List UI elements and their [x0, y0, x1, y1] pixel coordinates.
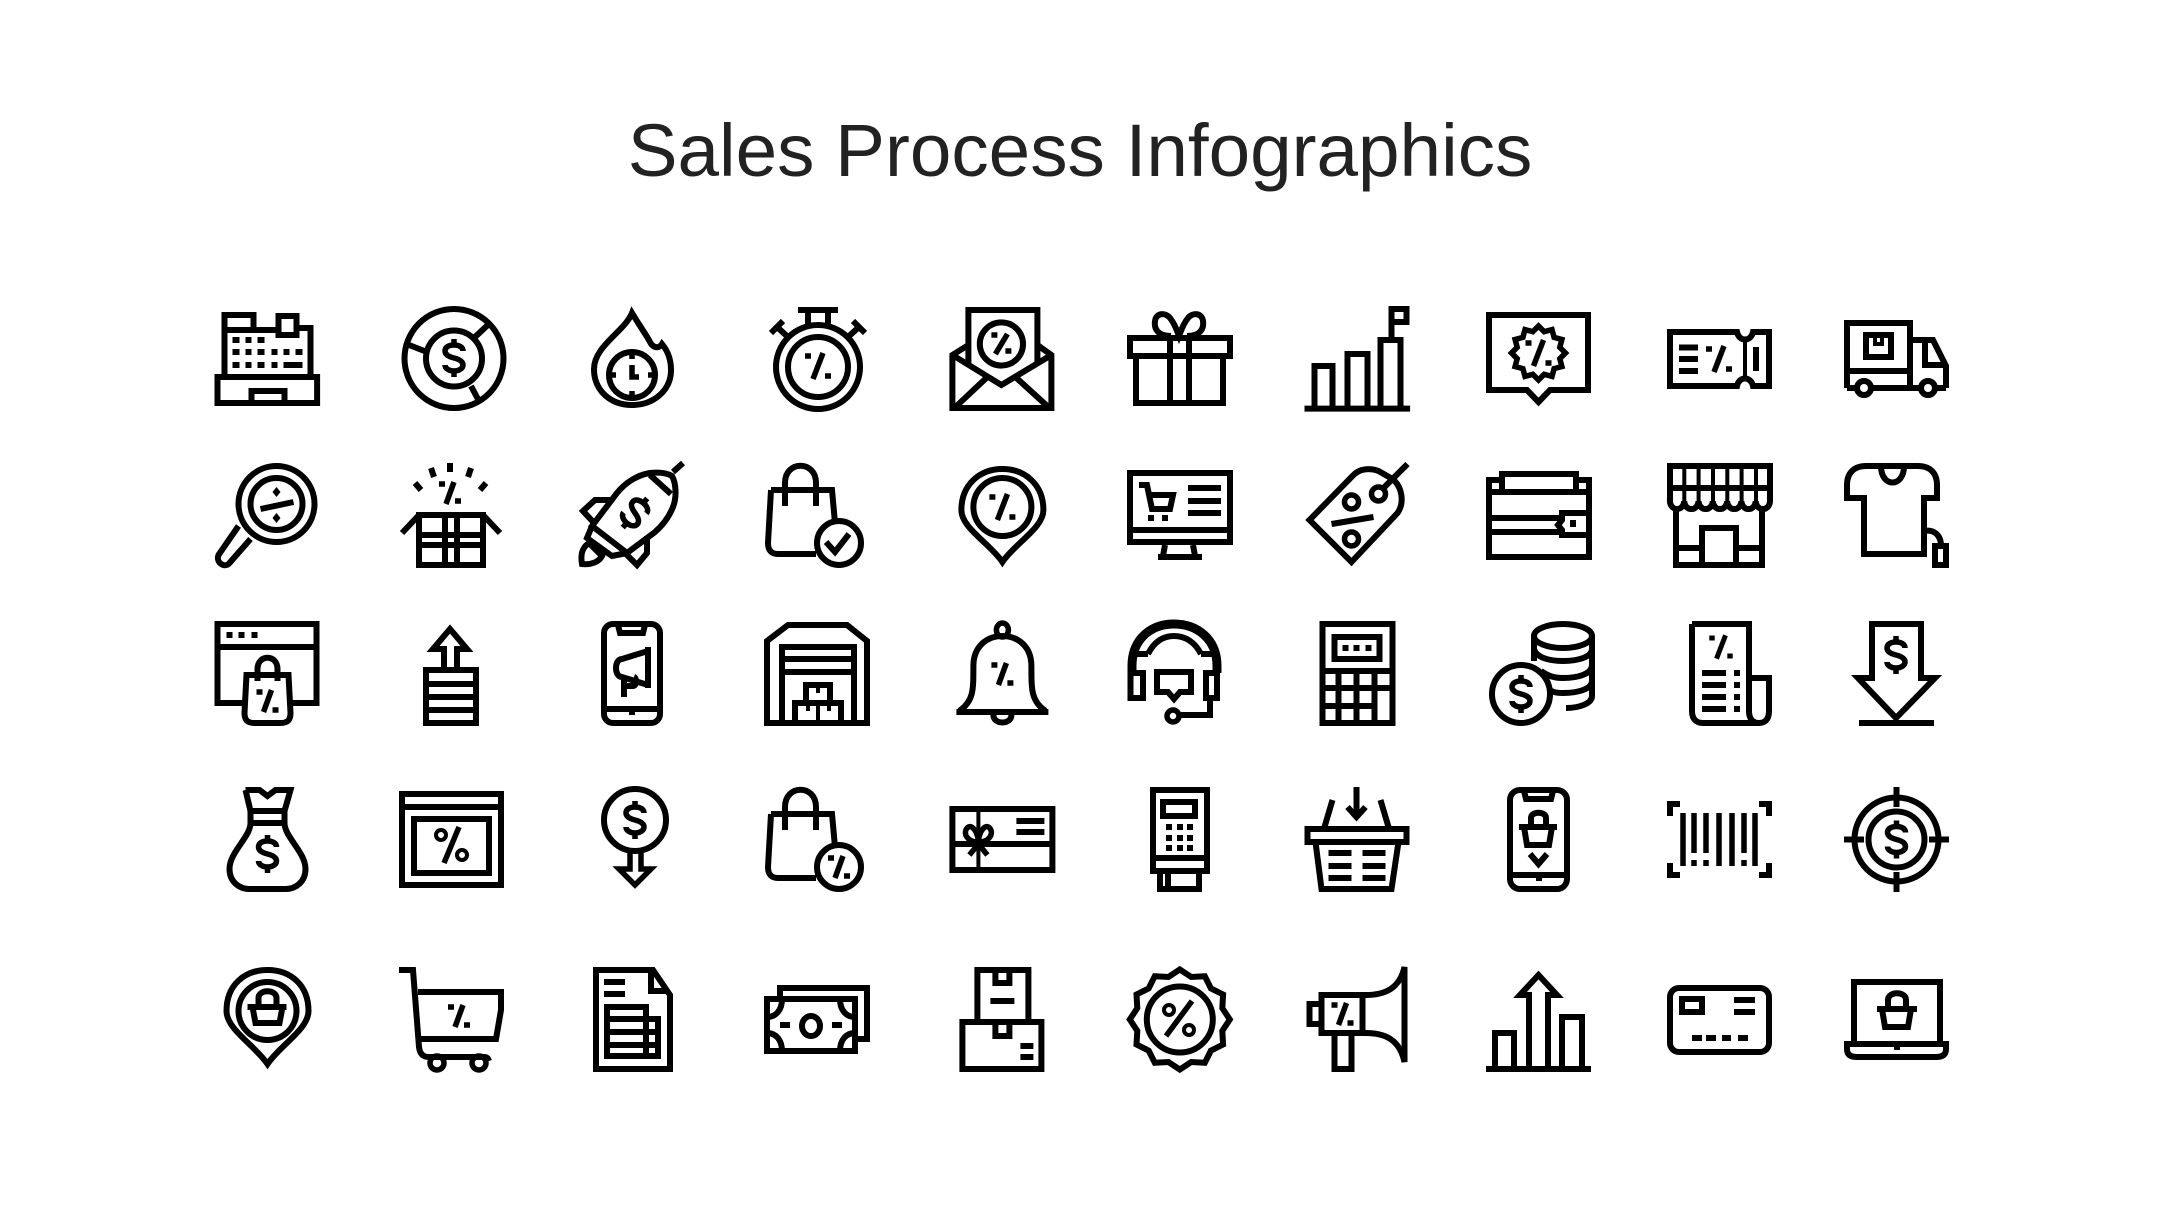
- icon: t-shirt with tag: [1847, 466, 1946, 565]
- icon: mobile shopping: [1510, 790, 1567, 889]
- icon: basket location pin: [226, 970, 308, 1064]
- title: Sales Process Infographics: [628, 108, 1532, 192]
- icon: dollar with down arrow: [604, 789, 666, 885]
- icon: storefront: [1670, 466, 1770, 565]
- icon: cash register: [218, 315, 317, 403]
- icon: open box with discount: [402, 463, 500, 565]
- icon: discount envelope: [952, 310, 1051, 408]
- icon: shopping basket: [1308, 787, 1406, 889]
- icon: dollar target: [1844, 787, 1949, 892]
- icon: delivery truck: [1847, 323, 1946, 395]
- icon: calculator: [1322, 624, 1392, 723]
- icon: flame with clock: [594, 313, 671, 405]
- icon: magnifier with divide sign: [218, 466, 314, 565]
- icon: gift box: [1130, 314, 1230, 403]
- icon: discount badge: [1130, 970, 1230, 1070]
- icon: sales receipt: [1692, 624, 1769, 723]
- icon: discount speech bubble: [1489, 315, 1588, 402]
- icon: dollar down arrow: [1858, 624, 1935, 723]
- icon: wallet: [1489, 474, 1589, 557]
- icon: stacked parcels: [962, 970, 1041, 1069]
- icon: card payment terminal: [1153, 790, 1207, 889]
- icon: coupon ticket: [1670, 332, 1769, 386]
- icon: dollar rocket: [581, 463, 683, 565]
- icon: shopping bag with check: [768, 466, 861, 565]
- icon: gift card: [952, 809, 1052, 870]
- icon: coin stack: [1492, 624, 1592, 723]
- icon: warehouse: [767, 625, 867, 723]
- icon: shopping bag with discount: [768, 790, 861, 889]
- icon: phone with megaphone: [604, 624, 660, 723]
- icon: discount location pin: [961, 469, 1043, 562]
- icon: stopwatch discount: [771, 310, 865, 409]
- icon: dollar pie chart: [404, 309, 504, 408]
- icon: money bag: [230, 790, 306, 889]
- icon: spreadsheet document: [596, 970, 670, 1069]
- icon: price tag: [1310, 464, 1408, 562]
- icon: rising arrow chart: [1486, 975, 1591, 1069]
- icon: online shop browser window: [218, 624, 316, 723]
- icon: barcode scanner frame: [1670, 804, 1769, 875]
- icon: online store monitor: [1130, 473, 1230, 557]
- icon: notification bell: [956, 623, 1048, 722]
- icon: up arrow with stack: [426, 629, 476, 723]
- icon: growth chart with flag: [1304, 309, 1410, 409]
- icon: megaphone discount: [1310, 967, 1404, 1069]
- icon: support headset: [1130, 624, 1217, 722]
- icon: credit card: [1670, 988, 1769, 1052]
- icon: banknotes: [767, 988, 867, 1051]
- icon: laptop online basket: [1847, 982, 1946, 1057]
- icon: sale banner window: [402, 794, 501, 885]
- icon: shopping cart: [399, 970, 501, 1070]
